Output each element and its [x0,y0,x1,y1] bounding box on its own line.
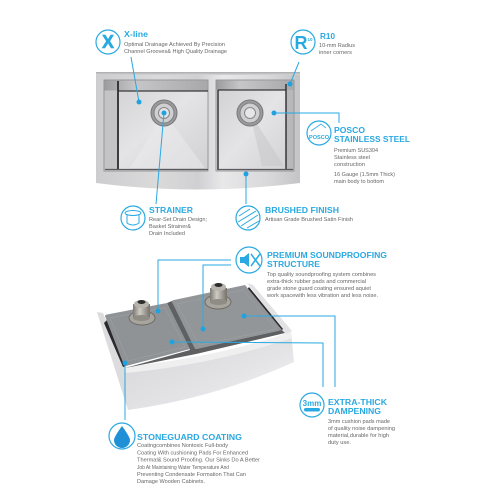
feature: extra-thick dampening: duty use. [328,440,351,446]
feature: R10: 10-mm Radius [319,43,356,49]
feature: stoneguard coating [109,423,260,485]
feature: POSCO stainless steel: STAINLESS STEEL [334,135,410,144]
feature: POSCO stainless steel: Stainless steel [334,155,370,161]
feature: premium soundproofing: PREMIUM SOUNDPROOFING [267,251,387,260]
feature: POSCO stainless steel [307,121,410,185]
feature: POSCO stainless steel: main body to bottom [334,179,384,185]
feature: R10: inner corners [319,50,353,56]
feature: premium soundproofing: extra-thick rubber pads and commercial [267,279,366,285]
callout lines: top sink [131,57,339,204]
icon: 3mm pad: 3mm [303,399,321,408]
icon: R10 [291,30,315,54]
feature: premium soundproofing: Top quality soundproofing system combines [267,272,377,278]
right drain pipe [205,283,231,309]
left drain pipe [129,300,155,325]
right flange [247,283,292,334]
icon: brushed lines [236,206,260,230]
feature: POSCO stainless steel: 16 Gauge (1.5mm Thick) [334,172,395,178]
feature: R10: R10 [320,32,336,41]
left bowl [104,80,208,171]
feature: stoneguard coating: STONEGUARD COATING [137,433,242,442]
feature: brushed finish: BRUSHED FINISH [265,206,339,215]
photo: underside of sink with sound pads [97,283,294,410]
feature: strainer: Drain Included [149,231,185,237]
feature: premium soundproofing: work spacewith less vibration and less noise. [267,293,378,299]
feature: stoneguard coating: Coatingcombines Nontoxic Full-body [137,443,229,449]
right sound pad [172,285,282,349]
feature: X-line: Channel Grooves& High Quality Drainage [124,49,227,55]
feature: POSCO stainless steel: construction [334,162,365,168]
right drain strainer [237,100,263,126]
feature: X-line: X-line [124,30,149,39]
feature: extra-thick dampening: material,durable for high [328,433,389,439]
feature: extra-thick dampening [300,393,395,446]
feature: premium soundproofing: grade stone guard coating ensured aquiet [267,286,372,292]
feature: X-line [96,30,227,55]
feature: strainer: Basket Strainer& [149,224,192,230]
feature: brushed finish: Artisan Grade Brushed Satin Finish [265,217,353,223]
feature: extra-thick dampening: EXTRA-THICK [328,398,387,407]
photo: top view of double-bowl sink [96,72,300,190]
feature: stoneguard coating: Thermal& Sound Proofing. Our Sinks Do A Better [137,458,260,464]
feature: premium soundproofing: STRUCTURE [267,260,321,269]
feature: extra-thick dampening: of quality noise dampening [328,426,395,432]
feature: strainer [121,206,207,237]
feature: strainer: STRAINER [149,206,193,215]
feature: POSCO stainless steel: POSCO [334,126,365,135]
feature: R10 [291,30,356,56]
icon: POSCO: POSCO [309,135,329,141]
feature: brushed finish [236,206,353,230]
left sound pad [105,303,190,366]
icon: R10: 10 [307,37,313,42]
left drain strainer [151,100,177,126]
feature: X-line: Optimal Drainage Achieved By Precision [124,42,225,48]
feature: strainer: Rear-Set Drain Design; [149,217,207,223]
feature: extra-thick dampening: DAMPENING [328,407,381,416]
feature: extra-thick dampening: 3mm cushion pads made [328,419,390,425]
apron front face [125,332,294,410]
feature: stoneguard coating: Preventing Condensate Formation That Can [137,472,246,478]
feature: stoneguard coating: Job At Maintaining Water Temperature And [137,465,229,471]
feature: premium soundproofing [236,247,387,299]
callout lines: lower sink [122,260,335,420]
icon: strainer basket [121,206,145,230]
feature: stoneguard coating: Coating With cushioning Pads For Enhanced [137,450,248,456]
left flange [97,312,128,410]
icon: X: X [102,32,114,52]
feature: POSCO stainless steel: Premium SUS304 [334,148,378,154]
icon: muted speaker [236,247,262,273]
feature: stoneguard coating: Damage Wooden Cabinets. [137,479,205,485]
icon: water drop [109,423,135,449]
icon: R10: R [294,33,308,53]
right bowl [216,80,294,171]
